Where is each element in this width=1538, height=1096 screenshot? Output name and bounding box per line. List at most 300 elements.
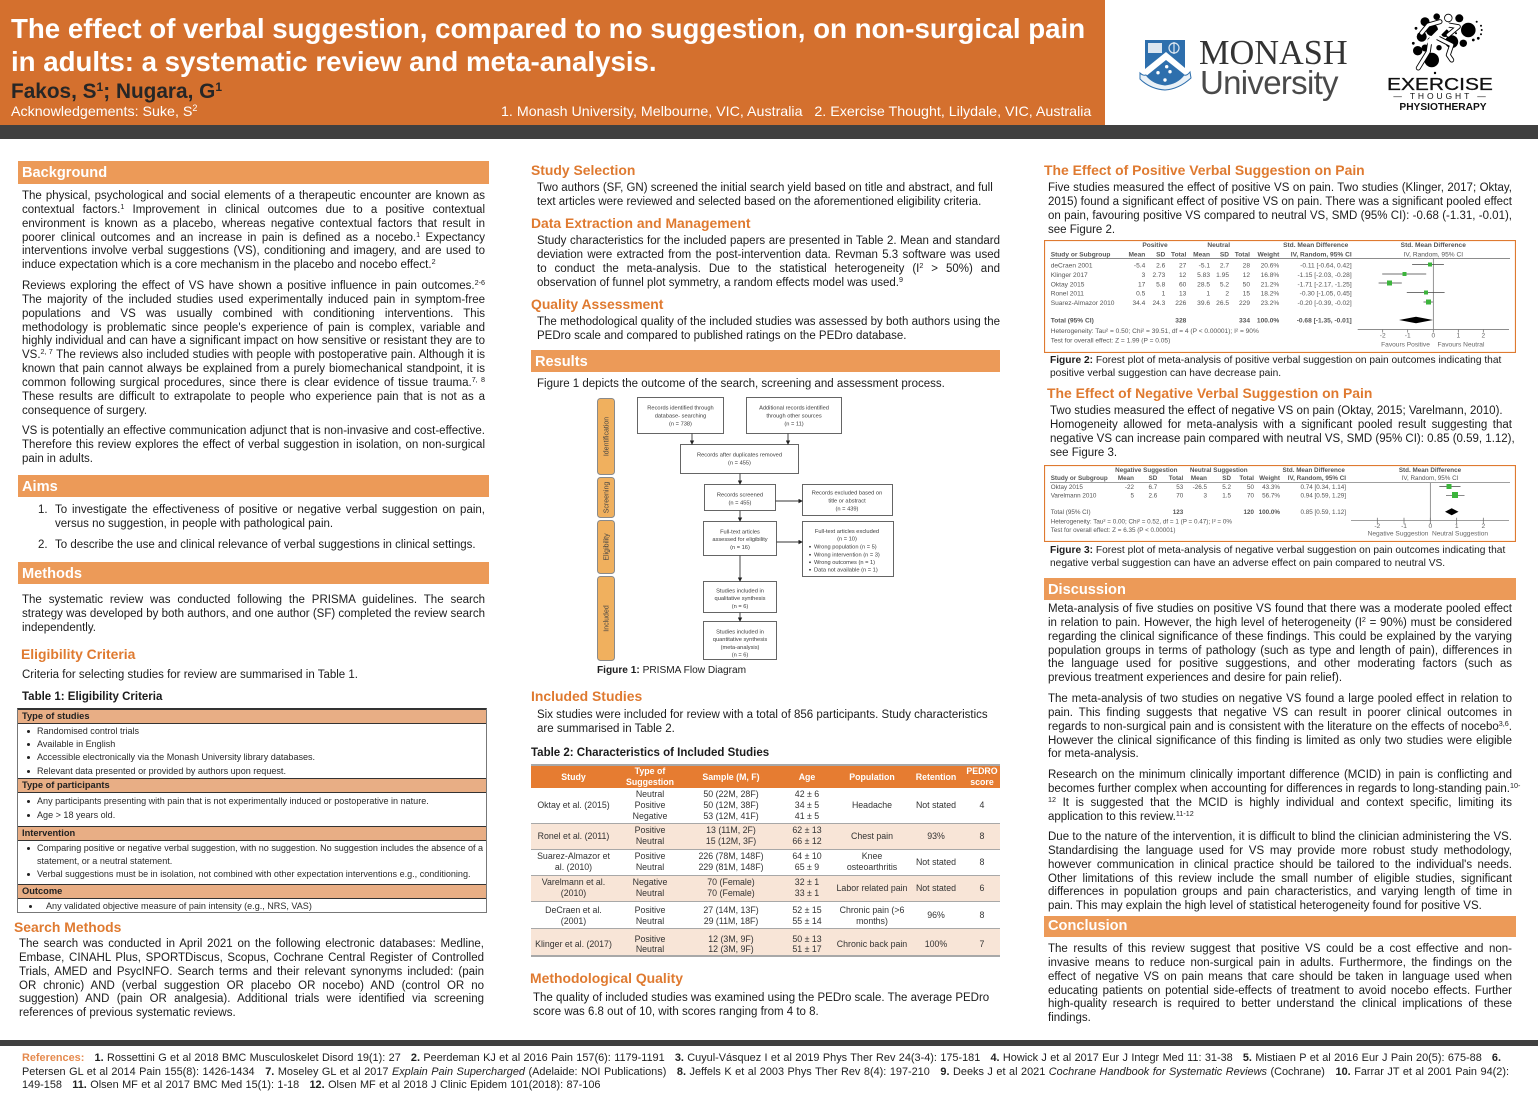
table 2: characteristics of included studies: months) [856, 916, 888, 926]
table 2: characteristics of included studies: 12 (3M, 9F) [708, 934, 754, 944]
table 2: characteristics of included studies: 226 (78M, 148F) [698, 851, 764, 861]
table 2: characteristics of included studies: Positive [635, 905, 665, 915]
heading: discussion: Discussion [1048, 582, 1126, 598]
text: discussion paragraph 1: the language used for positive suggestions, and other moderating factors (such as [1048, 658, 1512, 670]
text: background paragraph 1: interventions involve verbal suggestions (VS), conditioning and imagery, and are used to [22, 245, 485, 257]
text: background paragraph 1 [22, 190, 485, 271]
table 2: characteristics of included studies: Negative [633, 877, 667, 887]
panel: methods [18, 562, 489, 634]
table 2: characteristics of included studies: al. (2010) [555, 862, 592, 872]
text: discussion paragraph 3 [1048, 769, 1512, 824]
table 2: characteristics of included studies: Neutral [636, 836, 664, 846]
table 2: characteristics of included studies: 64 ± 10 [792, 851, 822, 861]
table 2: characteristics of included studies: Ronel et al. (2011) [538, 831, 609, 841]
table title: Table 1: Eligibility Criteria [22, 691, 162, 703]
forest plot table text: Ronel 2011 [1051, 291, 1084, 298]
text: background paragraph 2: The majority of the included studies used experimentally induced pain in symptom-free [22, 294, 485, 306]
PRISMA box text: quantitative synthesis [713, 637, 767, 643]
PRISMA stage labels [598, 398, 614, 660]
table 2: characteristics of included studies: 51 ± 17 [792, 944, 822, 954]
table 2: characteristics of included studies [531, 764, 1000, 957]
forest plot table text: 5.8 [1156, 281, 1166, 288]
forest plot table text: Test for overall effect: Z = 1.99 (P = 0.05) [1051, 338, 1170, 345]
text: data extraction: deviation were extracted from the post-intervention data. Revman 5.3 software was used [537, 249, 1000, 261]
panel: background [18, 161, 489, 465]
text: positive verbal suggestion: see Figure 2. [1048, 224, 1115, 236]
title: in adults: a systematic review and meta-analysis. [11, 46, 657, 77]
text: data extraction: observation of funnel plot symmetry, a random effects model was used.9 [537, 275, 903, 289]
table 2: characteristics of included studies: 70 (Female) [707, 888, 755, 898]
text: discussion paragraph 1: regarding the clinical significance of these findings. This could be explained by the varying [1048, 631, 1512, 643]
aim 2: 2. [38, 539, 48, 551]
forest plot table text: 120 [1243, 509, 1254, 516]
list: type of studies: Randomised control trials [37, 726, 139, 736]
table 2: characteristics of included studies: 65 ± 9 [795, 862, 819, 872]
text: discussion paragraph 3: application to this review.11-12 [1048, 809, 1194, 823]
table 2: characteristics of included studies: Positive [635, 851, 665, 861]
text: discussion paragraph 4 [1048, 831, 1512, 914]
forest plot table text: 123 [1173, 509, 1184, 516]
table 2: characteristics of included studies: 13 (11M, 2F) [706, 825, 756, 835]
panel: effect of negative verbal suggestion [1044, 385, 1516, 570]
text: background paragraph 2: known that pain cannot always be explained from a purely biomechanical standpoint, it is [22, 363, 485, 375]
heading: conclusion: Conclusion [1048, 918, 1127, 934]
text: background paragraph 3: VS is potentially an effective communication adjunct that is non-invasive and cost-effective. [22, 425, 485, 437]
table 2: characteristics of included studies: 100% [925, 939, 947, 949]
forest plot table text: 28.5 [1197, 281, 1210, 288]
table 2: characteristics of included studies: 55 ± 14 [792, 916, 822, 926]
text: discussion paragraph 2 [1048, 693, 1512, 762]
table 2: characteristics of included studies: 50 ± 13 [792, 934, 822, 944]
table 2: characteristics of included studies: 53 (12M, 41F) [703, 811, 759, 821]
forest plot table text: 0.74 [0.34, 1.14] [1300, 484, 1346, 491]
text: methods: The systematic review was conducted following the PRISMA guidelines. The search [22, 594, 485, 606]
PRISMA box text: Studies included in [716, 630, 764, 636]
forest plot table text: Klinger 2017 [1051, 272, 1088, 279]
text: discussion paragraph 2: for meta-analysis. [1048, 748, 1139, 760]
PRISMA box text: Wrong outcomes (n = 1) [814, 560, 875, 566]
table 2: characteristics of included studies: Study [561, 772, 586, 782]
heading: background: Background [22, 165, 107, 181]
forest plot axis labels: Neutral Suggestion [1432, 530, 1488, 538]
forest plot table text: 50 [1247, 484, 1254, 491]
text: discussion paragraph 1 [1048, 603, 1512, 686]
text: negative verbal suggestion: negative VS can increase pain compared with neutral VS, SMD (95% CI): 0.85 (0.59, 1.12), [1050, 433, 1515, 445]
list: type of studies: Available in English [37, 739, 115, 749]
forest plot table text: 5.2 [1222, 484, 1231, 491]
table 2: characteristics of included studies: 8 [980, 831, 984, 841]
heading: study selection: Study Selection [531, 162, 635, 178]
text: search methods: Trials, AMED and PsycINFO. Search terms and their relevant synonyms included: (pain [19, 966, 484, 978]
forest plot table text: -0.30 [-1.05, 0.45] [1300, 291, 1352, 298]
forest plot table text: 6.7 [1149, 484, 1158, 491]
PRISMA box text: (n = 455) [729, 500, 752, 506]
forest plot table text: 20.6% [1261, 263, 1279, 270]
forest plot table text: IV, Random, 95% CI [1291, 252, 1352, 258]
forest plot axis labels: 0 [1431, 332, 1435, 340]
forest plot table text: 328 [1175, 318, 1187, 325]
logo: Monash University [1140, 33, 1348, 101]
panel: data extraction [531, 215, 1000, 289]
caption: figure 3: negative verbal suggestion can have an adverse effect on pain compared to neutral VS. [1050, 558, 1445, 569]
panel: study selection [531, 162, 993, 208]
table 2: characteristics of included studies: 41 ± 5 [795, 811, 819, 821]
text: background paragraph 2: common following surgical procedures, since there is clear evidence of tissue trauma.7, 8 [22, 375, 485, 389]
forest plot table text: 1 [1162, 291, 1166, 298]
text: methods: strategy was developed by both authors, and one author (SF) completed the review search [22, 608, 485, 620]
text: conclusion: invasive means to reduce non-surgical pain in adults. Furthermore, the findings on the [1048, 957, 1512, 969]
forest plot table text: 0.85 [0.59, 1.12] [1300, 509, 1346, 516]
text: discussion paragraph 1: previous treatment experiences and desire for pain relief). [1048, 672, 1342, 684]
forest plot table text: 2.6 [1149, 493, 1158, 500]
caption: figure 3: Figure 3: Forest plot of meta-analysis of negative verbal suggestion on pain outcomes indicating that [1050, 545, 1505, 556]
PRISMA box text: (n = 738) [669, 422, 692, 428]
table 2: characteristics of included studies: Not stated [916, 883, 956, 893]
text: conclusion: educating patients on potential side-effects of treatment to avoid nocebo effects. Further [1048, 985, 1512, 997]
table 2: characteristics of included studies: Oktay et al. (2015) [537, 800, 610, 810]
forest plot table text: 5 [1130, 493, 1134, 500]
PRISMA box text: title or abstract [828, 498, 866, 504]
heading: methodological quality: Methodological Quality [530, 970, 683, 986]
wordmark: University: University [1200, 64, 1338, 101]
forest plot table text: 2.73 [1152, 272, 1166, 279]
text: methodological quality: score was 6.8 out of 10, with scores ranging from 4 to 8. [533, 1006, 819, 1018]
table 2: characteristics of included studies: 4 [980, 800, 984, 810]
text: conclusion: The results of this review suggest that positive VS could be a cost effective and non- [1048, 943, 1512, 955]
forest plot table text: 17 [1138, 281, 1146, 288]
PRISMA stage labels: Screening [604, 482, 610, 513]
forest plot table text: -0.20 [-0.39, -0.02] [1297, 300, 1352, 307]
PRISMA box text: Records screened [717, 492, 763, 498]
forest plot axis labels: Favours Positive [1381, 342, 1430, 348]
PRISMA box text: (n = 16) [730, 545, 750, 551]
text: negative verbal suggestion: see Figure 3. [1050, 447, 1117, 459]
row: outcome [18, 884, 486, 899]
table 2: characteristics of included studies: 93% [927, 831, 945, 841]
forest plot axis labels: -2 [1374, 523, 1381, 530]
text: discussion paragraph 2: The meta-analysis of two studies on negative VS found a large pooled effect in relation to [1048, 693, 1512, 705]
text: discussion paragraph 4: pain. This may explain the high level of statistical heterogeneity found for positive VS. [1048, 900, 1482, 912]
table 2: characteristics of included studies: 12 (3M, 9F) [708, 944, 754, 954]
forest plot table text: 0.5 [1136, 291, 1146, 298]
forest plot table text: Heterogeneity: Tau² = 0.50; Chi² = 39.51, df = 4 (P < 0.00001); I² = 90% [1051, 328, 1259, 335]
text: study selection: Two authors (SF, GN) screened the initial search yield based on title and abstract, and full [537, 182, 993, 194]
forest plot table text: -1.71 [-2.17, -1.25] [1297, 281, 1352, 288]
forest plot table text: 56.7% [1262, 493, 1280, 500]
forest plot table text: -1.15 [-2.03, -0.28] [1297, 272, 1352, 279]
text: background paragraph 2: highly individual and can have a significant impact on how sensitive or resistant they are to [22, 335, 485, 347]
PRISMA box text: Additional records identified [759, 406, 829, 412]
forest plot table text: Varelmann 2010 [1051, 493, 1097, 500]
table 2: characteristics of included studies: Headache [852, 800, 892, 810]
forest plot table text [1051, 467, 1462, 534]
text: background paragraph 2: VS.2, 7 The reviews also included studies with people with postoperative pain. Although it is [22, 347, 485, 361]
table 2: characteristics of included studies: Not stated [916, 800, 956, 810]
table 2: characteristics of included studies: PEDRO [966, 766, 998, 776]
heading: methods: Methods [22, 566, 82, 582]
text: background paragraph 2: These results are difficult to extrapolate to people who experience pain that is not as a [22, 391, 485, 403]
forest plot table text: 50 [1243, 281, 1250, 288]
text: positive verbal suggestion: Five studies measured the effect of positive VS on pain. Two studies (Klinger, 2017; Oktay, [1048, 182, 1512, 194]
heading: positive verbal suggestion: The Effect of Positive Verbal Suggestion on Pain [1044, 162, 1365, 178]
forest plot axis labels: -1 [1405, 332, 1411, 340]
forest plot graphic [1050, 258, 1510, 332]
text: background paragraph 3: Therefore this review explores the effect of verbal suggestion in isolation, on non-surgical [22, 439, 485, 451]
table 2: characteristics of included studies: 8 [980, 857, 984, 867]
logo: Exercise Thought Physiotherapy [1387, 13, 1493, 113]
forest plot table text: 5.2 [1220, 281, 1229, 288]
forest plot table text: 23.2% [1261, 300, 1279, 307]
forest plot axis labels: Favours Neutral [1438, 342, 1485, 348]
PRISMA box text: (n = 439) [836, 506, 859, 512]
text: conclusion: effect of negative VS on pain means that care should be taken in language used when [1048, 971, 1512, 983]
forest plot table text: 0.94 [0.59, 1.29] [1300, 493, 1346, 500]
forest plot table text: Std. Mean Difference [1283, 467, 1345, 474]
footer divider bar [0, 1040, 1538, 1046]
caption: figure 2: Figure 2: Forest plot of meta-analysis of positive verbal suggestion on pain outcomes indicating that [1050, 355, 1501, 366]
chart: forest plot positive [1044, 240, 1516, 353]
forest plot table text: SD [1149, 475, 1158, 482]
text: discussion paragraph 2: pain. This finding suggests that negative VS can result in poorer clinical outcomes in [1048, 707, 1512, 719]
forest plot table text: Study or Subgroup [1051, 252, 1110, 258]
forest plot table text: 43.3% [1262, 484, 1280, 491]
PRISMA box text: Full-text articles [720, 530, 760, 536]
forest plot table text: deCraen 2001 [1051, 263, 1093, 270]
forest plot axis labels: -1 [1401, 523, 1407, 530]
forest plot table text: 21.2% [1261, 281, 1279, 288]
caption: figure 2 [1050, 355, 1501, 380]
text: positive verbal suggestion [1048, 182, 1512, 236]
table 2: characteristics of included studies: Suarez-Almazor et [537, 851, 610, 861]
text: negative verbal suggestion: Two studies measured the effect of negative VS on pain (Oktay, 2015; Varelmann, 2010). [1050, 405, 1503, 417]
panel: included studies [531, 688, 1000, 957]
table 2: characteristics of included studies: (2010) [561, 888, 586, 898]
table 2: characteristics of included studies: 62 ± 13 [792, 825, 822, 835]
chart: PRISMA flow diagram [597, 397, 894, 661]
table 2: characteristics of included studies: 6 [980, 883, 984, 893]
text: negative verbal suggestion: Homogeneity allowed for meta-analysis with a significant pooled result suggesting that [1050, 419, 1512, 431]
list: type of participants [27, 796, 429, 820]
text: included studies [537, 709, 988, 735]
forest plot table text: 3 [1142, 272, 1146, 279]
text: conclusion: findings. [1048, 1012, 1091, 1024]
table 2: characteristics of included studies: Varelmann et al. [542, 877, 605, 887]
text: data extraction [537, 235, 1000, 289]
forest plot table text: Std. Mean Difference [1283, 242, 1349, 249]
header banner [0, 0, 1105, 125]
text: discussion paragraph 3: Research on the minimum clinically important difference (MCID) in pain is conflicting and [1048, 769, 1512, 781]
aim 1 [38, 504, 485, 530]
text: discussion paragraph 4: Standardising the language used for VS may provide more robust study methodology, [1048, 845, 1512, 857]
text: negative verbal suggestion [1050, 405, 1512, 460]
forest plot table text: 2.6 [1156, 263, 1166, 270]
panel: discussion [1044, 578, 1516, 913]
forest plot table text: -5.4 [1134, 263, 1146, 270]
forest plot table text: 70 [1247, 493, 1254, 500]
text: discussion paragraph 4: Due to the nature of the intervention, it is difficult to blind the clinician administering the VS. [1048, 831, 1512, 843]
forest plot table text: Heterogeneity: Tau² = 0.00; Chi² = 0.52, df = 1 (P = 0.47); I² = 0% [1051, 518, 1232, 525]
forest plot table text: Total [1171, 252, 1186, 258]
PRISMA box text: Data not available (n = 1) [814, 568, 878, 574]
forest plot table text: 100.0% [1259, 509, 1280, 516]
forest plot table text: 334 [1239, 318, 1250, 325]
table 2: characteristics of included studies: 50 (22M, 28F) [703, 789, 759, 799]
panel: conclusion [1044, 916, 1516, 1025]
forest plot table text: Suarez-Almazor 2010 [1051, 300, 1115, 307]
text: search methods: OR chronic) AND (verbal suggestion OR placebo OR nocebo) AND (control OR no [19, 980, 484, 992]
table 2: characteristics of included studies: Neutral [636, 789, 664, 799]
list: type of studies [27, 726, 315, 776]
PRISMA box text: Full-text articles excluded [815, 529, 879, 535]
wordmark: EXERCISE: EXERCISE [1387, 74, 1493, 94]
forest plot table text: -26.5 [1193, 484, 1207, 491]
text: background paragraph 2 [22, 278, 485, 417]
text: search methods: The search was conducted in April 2021 on the following electronic databases: Medline, [19, 938, 484, 950]
text: background paragraph 1: environment is known as a placebo, whereas negative contextual factors that result in [22, 218, 485, 230]
icon: Monash shield [1140, 40, 1192, 90]
forest plot table text: 2 [1225, 291, 1229, 298]
PRISMA stage labels: Eligibility [604, 533, 610, 561]
heading: discussion [1044, 578, 1516, 600]
text: search methods: suggestion) AND (pain OR analgesia). Additional trials were identified via screening [19, 993, 484, 1005]
panel: aims [18, 475, 489, 551]
list: type of studies: Relevant data presented or provided by authors upon request. [37, 766, 286, 776]
table 2: characteristics of included studies: (2001) [561, 916, 586, 926]
forest plot table text: 70 [1176, 493, 1184, 500]
PRISMA box text: assessed for eligibility [712, 537, 768, 543]
forest plot table text: Study or Subgroup [1051, 475, 1108, 482]
forest plot table text: Oktay 2015 [1051, 484, 1083, 491]
table 2: characteristics of included studies: osteoarthritis [847, 862, 897, 872]
table 2: characteristics of included studies: Neutral [636, 888, 664, 898]
table 1: eligibility criteria [17, 708, 487, 913]
forest plot table text: 2.7 [1220, 263, 1229, 270]
text: discussion paragraph 1: Meta-analysis of five studies on positive VS found that there was a moderate pooled effect [1048, 603, 1512, 615]
panel: methodological quality [530, 970, 989, 1018]
aim 1: versus no suggestion, in people with pathological pain. [55, 518, 333, 530]
forest plot table text: SD [1220, 252, 1229, 258]
PRISMA stage labels: Identification [604, 417, 610, 456]
header divider bar [0, 125, 1538, 139]
forest plot table text: 16.8% [1261, 272, 1279, 279]
text: positive verbal suggestion: 2015) found a significant effect of positive VS on pain. There was a significant pooled effect [1048, 196, 1512, 208]
PRISMA box text: Wrong population (n = 5) [814, 544, 877, 550]
heading: negative verbal suggestion: The Effect of Negative Verbal Suggestion on Pain [1047, 385, 1372, 401]
PRISMA box text: (n = 6) [732, 652, 748, 658]
table 2: characteristics of included studies: Positive [635, 800, 665, 810]
panel: results [531, 350, 1000, 676]
PRISMA box text: Records excluded based on [812, 490, 882, 496]
PRISMA box text: Records identified through [647, 406, 714, 412]
forest plot table text: 1.95 [1216, 272, 1229, 279]
heading: search methods: Search Methods [14, 919, 121, 935]
forest plot table text: IV, Random, 95% CI [1404, 252, 1463, 258]
table 2: characteristics of included studies: Chronic pain (>6 [840, 905, 904, 915]
forest plot table text [1051, 242, 1466, 345]
text: background paragraph 2: consequence of surgery. [22, 405, 147, 417]
table 2: characteristics of included studies: Labor related pain [837, 883, 907, 893]
forest plot table text: Mean [1191, 475, 1207, 482]
table 2: characteristics of included studies: Positive [635, 825, 665, 835]
text: search methods: references of previous systematic reviews. [19, 1007, 236, 1019]
acknowledgements: Acknowledgements: Suke, S2 [11, 103, 197, 120]
panel: effect of positive verbal suggestion [1044, 162, 1516, 378]
text: results intro: Figure 1 depicts the outcome of the search, screening and assessment process. [537, 378, 945, 390]
PRISMA box text [647, 406, 882, 658]
panel: references: References: 1. Rossettini G et al 2018 BMC Musculoskelet Disord 19(1): 27 2. Peerdeman KJ et al 2016 Pain 157(6): 1179-1191 3. Cuyul-Vásquez I et al 2019 Phys Ther Rev 24(3-4): 175-181 4. Howick J et al 2017 Eur J Integr Med 11: 31-38 5. Mistiaen P et al 2016 Eur J Pain 20(5): 675-88 6. [22, 1052, 1501, 1064]
text: discussion paragraph 3: becomes further complex when accounting for differences in regards to long-standing pain.10- [1048, 781, 1520, 795]
wordmark: THOUGHT: — THOUGHT — [1393, 91, 1489, 101]
forest plot table text: 18.2% [1261, 291, 1279, 298]
table 2: characteristics of included studies: 52 ± 15 [792, 905, 822, 915]
aim 1: 1. [38, 504, 48, 516]
panel: references [15, 1052, 1515, 1094]
forest plot table text: Total [1239, 475, 1254, 482]
forest plot table text: Oktay 2015 [1051, 281, 1085, 288]
forest plot table text: IV, Random, 95% CI [1288, 475, 1346, 482]
row: type of participants: Type of participants [22, 780, 110, 790]
text: search methods [19, 938, 484, 1019]
table 2: characteristics of included studies: 66 ± 12 [792, 836, 822, 846]
PRISMA box text: qualitative synthesis [715, 596, 766, 602]
text: background paragraph 1: induce expectation which is a core mechanism in the placebo and nocebo effect.2 [22, 257, 436, 271]
table 2: characteristics of included studies: 70 (Female) [707, 877, 755, 887]
forest plot table text: SD [1222, 475, 1231, 482]
title [11, 13, 1085, 77]
heading: background [18, 161, 489, 184]
text: discussion paragraph 4: Other limitations of this review include the small number of eligible studies, significant [1048, 873, 1512, 885]
forest plot axis labels: -2 [1380, 332, 1386, 340]
forest plot axis labels [1380, 332, 1485, 348]
text: background paragraph 2: methodology is problematic since people's experience of pain is complex, variable and [22, 322, 485, 334]
forest plot table text: 27 [1179, 263, 1187, 270]
PRISMA boxes [638, 398, 894, 660]
forest plot table text: Std. Mean Difference [1399, 467, 1462, 474]
forest plot table text: Mean [1118, 475, 1134, 482]
panel: references: Petersen GL et al 2014 Pain 155(8): 1426-1434 7. Moseley GL et al 2017 Explain Pain Supercharged (Adelaide: NOI Publications) 8. Jeffels K et al 2003 Phys Ther Rev 8(4): 197-210 9. Deeks J et al 2021 Cochrane Handbook for Systematic Reviews (Cochrane) 10. Farrar JT et al 2001 Pain 94(2): [22, 1066, 1509, 1078]
table 2: characteristics of included studies: Chronic back pain [837, 939, 907, 949]
table 2: characteristics of included studies: 34 ± 5 [795, 800, 819, 810]
PRISMA box text: Studies included in [716, 588, 764, 594]
PRISMA box text: (n = 455) [728, 460, 751, 466]
text: background paragraph 2: Reviews exploring the effect of VS have shown a positive influence in pain outcomes.2-6 [22, 278, 485, 292]
text: quality assessment: PEDro scale and compared to published ratings on the PEDro database. [537, 330, 906, 342]
text: quality assessment [537, 316, 1000, 342]
table title: Table 2: Characteristics of Included Studies [531, 747, 769, 759]
PRISMA box text: Wrong intervention (n = 3) [814, 552, 880, 558]
forest plot table text: Mean [1193, 252, 1210, 258]
forest plot table text: Test for overall effect: Z = 6.35 (P < 0.00001) [1051, 527, 1175, 534]
heading: aims [18, 475, 489, 497]
text: discussion paragraph 2: regards to non-surgical pain and is consistent with the literature on the effects of nocebo3,6. [1048, 719, 1512, 733]
caption: figure 1: Figure 1: PRISMA Flow Diagram [597, 665, 746, 676]
text: data extraction: to conduct the meta-analysis. Due to the statistical heterogeneity (I2 > 50%) and [537, 261, 1000, 275]
forest plot table text: Mean [1128, 252, 1145, 258]
table 2: characteristics of included studies: Age [799, 772, 815, 782]
PRISMA box text: (n = 6) [732, 604, 748, 610]
forest plot table text: 12 [1243, 272, 1250, 279]
table 2: characteristics of included studies: Neutral [636, 862, 664, 872]
forest plot table text: Negative Suggestion [1115, 467, 1178, 474]
forest plot axis labels: 0 [1428, 523, 1432, 530]
text: quality assessment: The methodological quality of the included studies was assessed by both authors using the [537, 316, 1000, 328]
row: intervention: Intervention [22, 828, 75, 838]
table 2: characteristics of included studies: Neutral [636, 944, 664, 954]
list: intervention: statement, or a neutral statement. [37, 856, 172, 866]
text: background paragraph 1: The physical, psychological and social elements of a therapeutic encounter are known as [22, 190, 485, 202]
text: data extraction: Study characteristics for the included papers are presented in Table 2. Mean and standard [537, 235, 1000, 247]
panel: eligibility criteria [17, 646, 487, 913]
